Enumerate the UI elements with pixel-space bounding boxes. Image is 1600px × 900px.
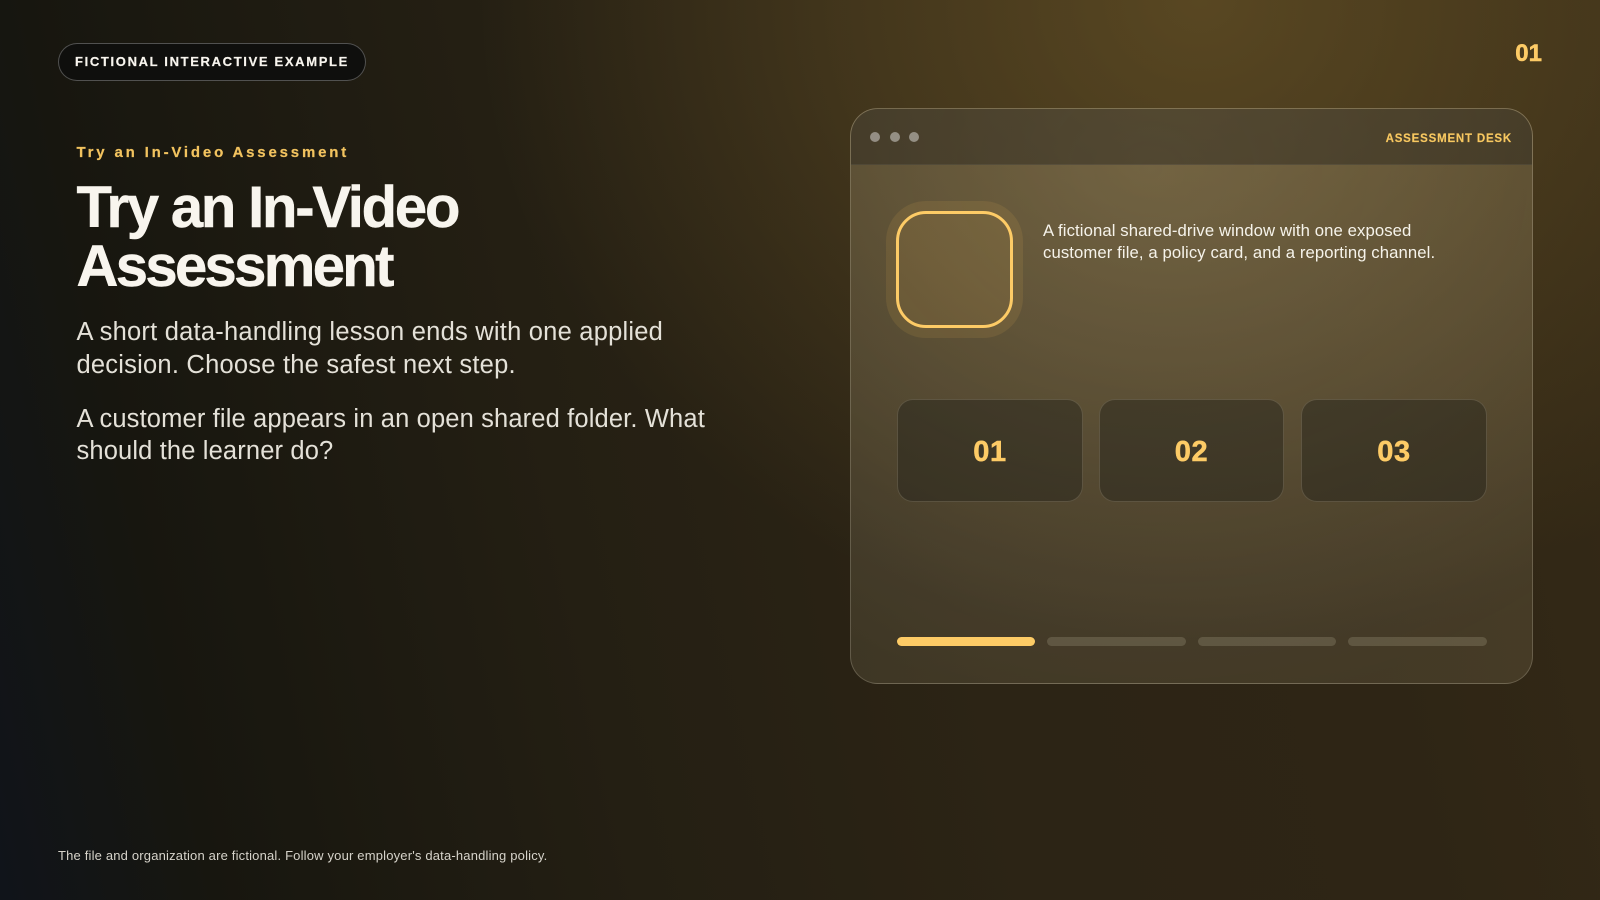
header label: ASSESSMENT DESK [1386,133,1512,145]
option card 01: 01 [973,436,1007,468]
title: Assessment [76,234,392,299]
scenario question text [76,405,705,465]
progress segment active [897,637,1035,646]
window dot two [890,132,900,142]
window dot three [909,132,919,142]
panel: assessment desk window [850,108,1533,684]
scenario description [1043,221,1435,262]
scenario question text: should the learner do? [76,437,333,465]
scenario description: A fictional shared-drive window with one exposed [1043,221,1411,240]
option card 03 [1301,399,1487,502]
option card 02 [1099,399,1284,502]
lesson intro text: A short data-handling lesson ends with one applied [76,318,663,346]
lesson intro text [76,318,663,379]
window dot one [870,132,880,142]
badge: fictional interactive example [58,43,366,81]
progress segment three [1198,637,1336,646]
scenario question text: A customer file appears in an open shared folder. What [76,405,705,433]
eyebrow: Try an In-Video Assessment [76,144,349,161]
title: Try an In-Video [76,175,458,240]
lesson intro text: decision. Choose the safest next step. [76,351,516,379]
title [76,175,458,299]
option card 01 [897,399,1083,502]
icon: empty rounded frame with halo [896,211,1013,328]
page number: 01 [1515,40,1542,67]
scenario description: customer file, a policy card, and a reporting channel. [1043,242,1435,262]
window header bar [851,109,1532,165]
badge: fictional interactive example: FICTIONAL INTERACTIVE EXAMPLE [75,54,349,69]
footnote: The file and organization are fictional. Follow your employer's data-handling policy. [58,848,547,863]
progress segment two [1047,637,1186,646]
option card 02: 02 [1175,436,1208,468]
progress segment four [1348,637,1487,646]
option card 03: 03 [1377,436,1411,468]
